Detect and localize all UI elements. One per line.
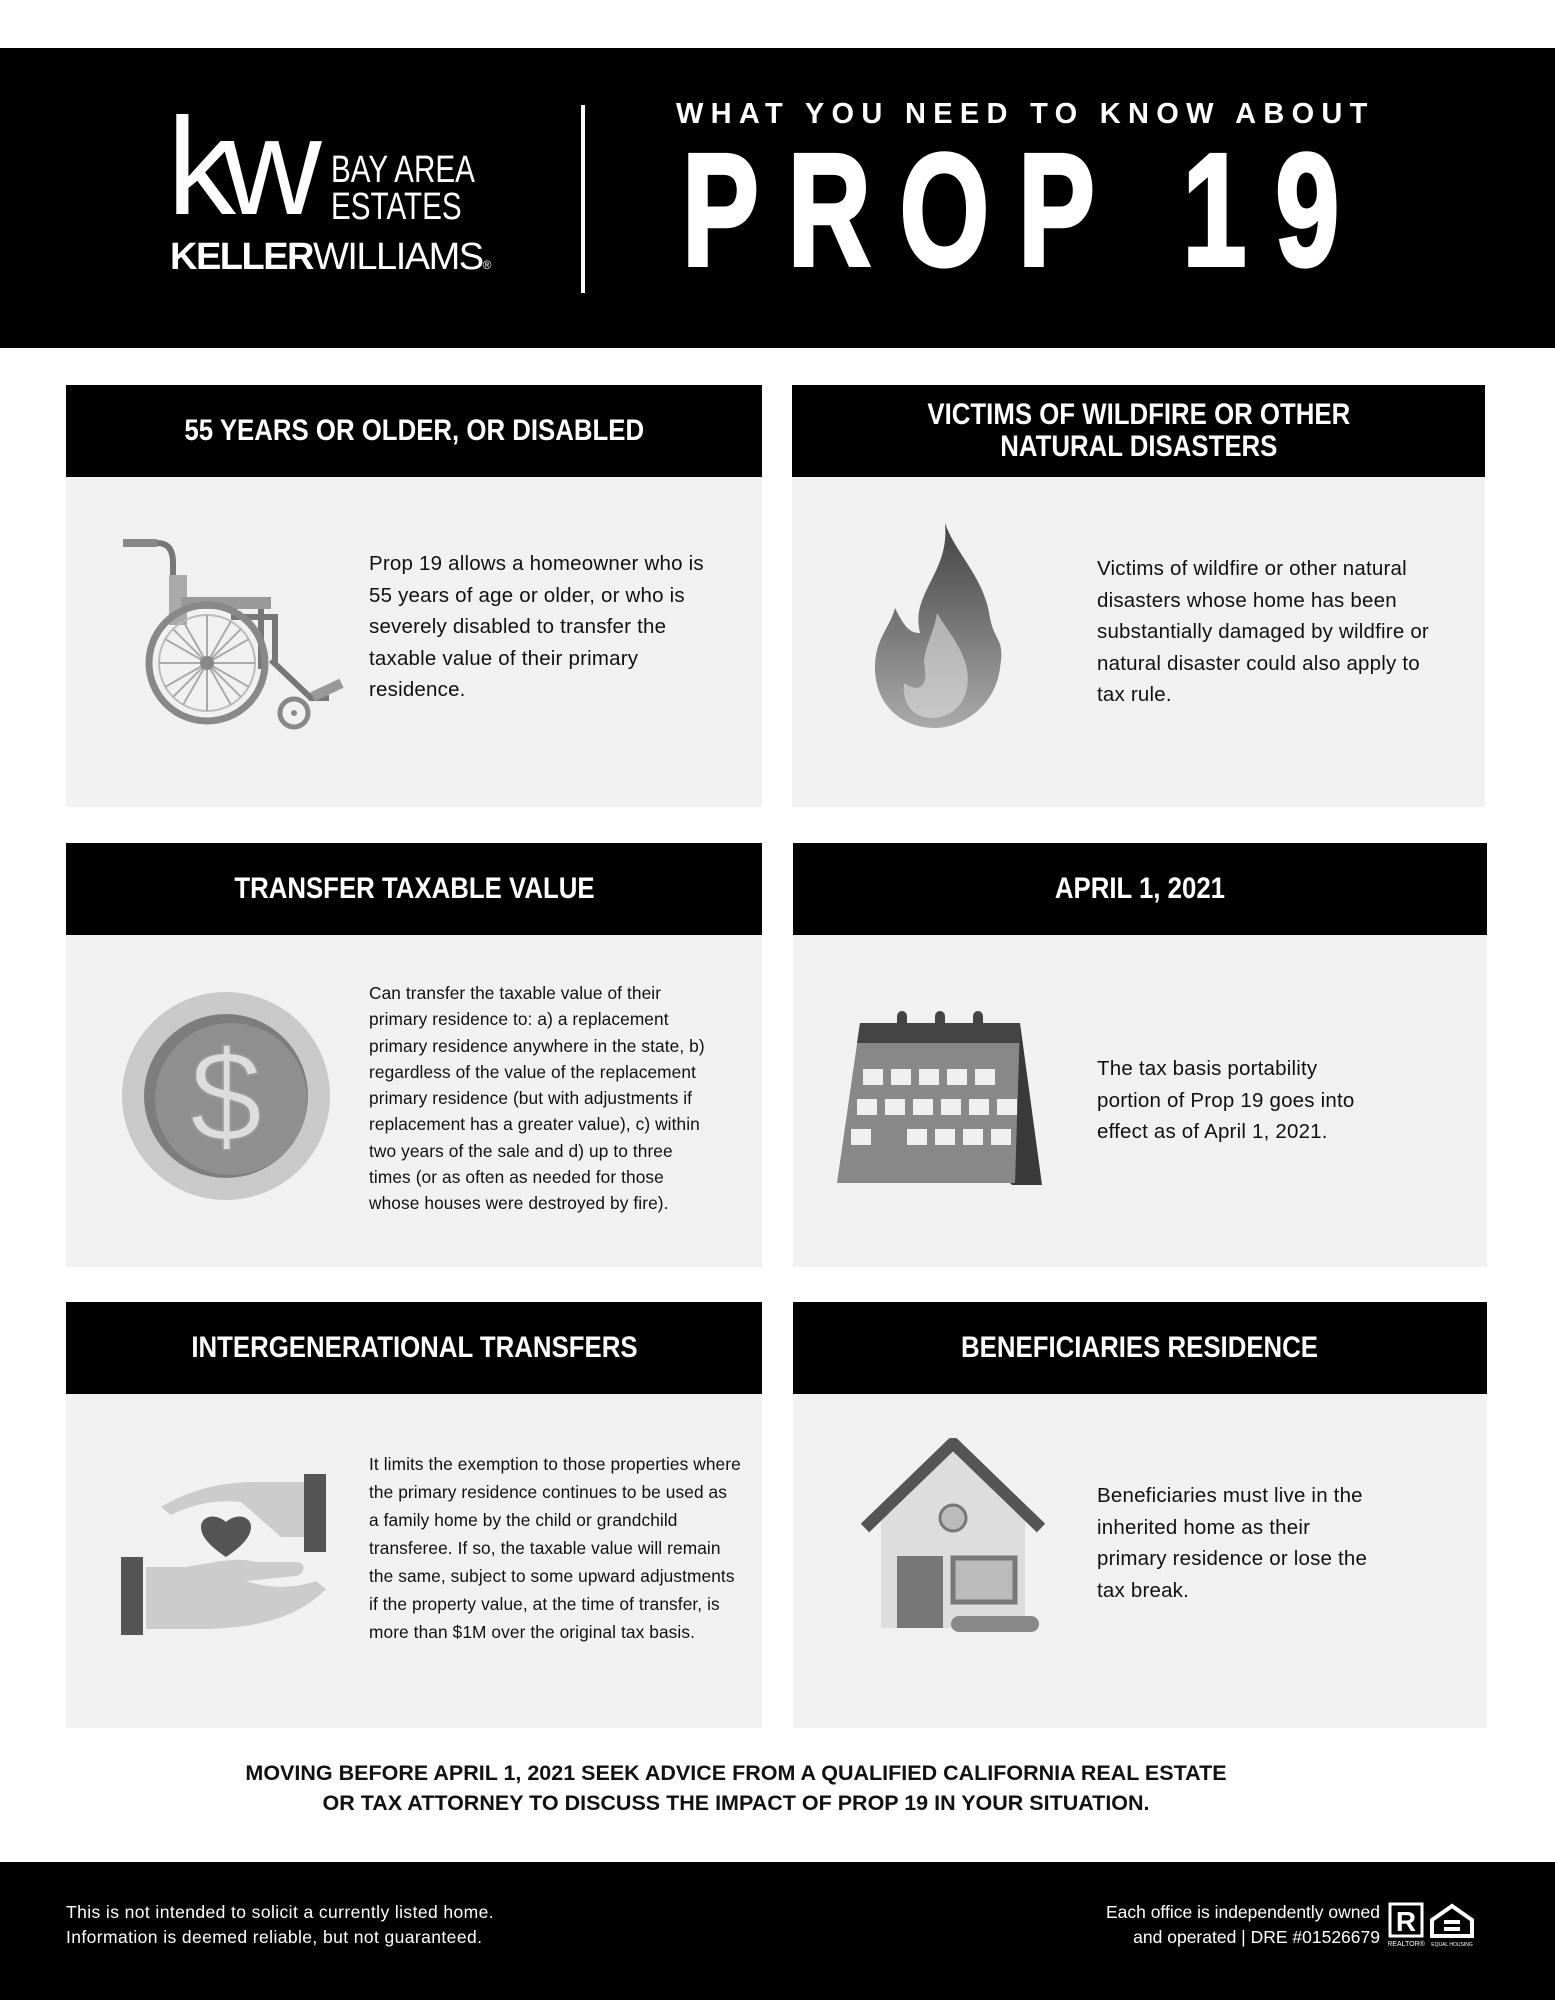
icon: coin: $ [190, 1023, 262, 1169]
icon: realtor and equal housing: REALTOR® [1388, 1940, 1426, 1948]
panel: transfer taxable value [66, 843, 762, 1267]
heading [66, 1302, 762, 1394]
logo kw mark: kw [167, 90, 308, 244]
panel: 55 years [66, 385, 762, 807]
text: The tax basis portability portion of Prop 19 goes into effect as of April 1, 2021. [1097, 1057, 1354, 1143]
icon: realtor and equal housing: EQUAL HOUSING [1431, 1942, 1473, 1948]
heading: VICTIMS OF WILDFIRE OR OTHER [927, 398, 1350, 431]
heading: INTERGENERATIONAL TRANSFERS [191, 1331, 637, 1364]
footer [0, 1862, 1555, 2000]
icon: realtor and equal housing: R [1396, 1906, 1416, 1937]
panel: april 1 2021 [793, 843, 1487, 1267]
heading: BENEFICIARIES RESIDENCE [962, 1331, 1318, 1364]
panel: wildfire [792, 385, 1485, 807]
main title PROP 19: PROP 19 [682, 120, 1368, 299]
footer disclaimer [66, 1902, 494, 1947]
text: tax break. [1097, 1578, 1189, 1602]
logo bay area estates: BAY AREA [331, 149, 475, 191]
heading [66, 385, 762, 477]
panel: beneficiaries [793, 1302, 1487, 1728]
heading: TRANSFER TAXABLE VALUE [234, 872, 594, 905]
callout: bottom advice: MOVING BEFORE APRIL 1, 2021 SEEK ADVICE FROM A QUALIFIED CALIFORNIA REAL ESTATE [245, 1761, 1227, 1785]
heading: 55 YEARS OR OLDER, OR DISABLED [184, 414, 644, 447]
icon: house [861, 1438, 1045, 1632]
text: Victims of wildfire or other natural disasters whose home has been substantially damaged by wildfire or natural disaster could also apply to tax rule. [1097, 557, 1429, 706]
text: Prop 19 allows a homeowner who is 55 years of age or older, or who is severely disabled to transfer the taxable value of their primary residence. [369, 552, 704, 701]
panel: intergenerational [66, 1302, 762, 1728]
header band [0, 48, 1555, 348]
icon: realtor and equal housing [1388, 1902, 1474, 1948]
heading [66, 843, 762, 935]
logo keller williams: KELLERWILLIAMS® [170, 236, 490, 278]
heading [792, 385, 1485, 477]
logo [167, 90, 492, 278]
footer disclaimer: Information is deemed reliable, but not guaranteed. [66, 1927, 482, 1947]
text: inherited home as their [1097, 1516, 1310, 1538]
heading: NATURAL DISASTERS [1000, 430, 1277, 463]
logo bay area estates: ESTATES [331, 186, 462, 228]
text: Can transfer the taxable value of their primary residence to: a) a replacement primary residence anywhere in the state, b) regardless of the value of the replacement primary residence (but with adjustments if replacement has a greater value), c) within two years of the sale and d) up to three times (or as often as needed for those whose houses were destroyed by fire). [369, 983, 705, 1213]
icon: hands with heart [121, 1474, 326, 1635]
footer disclaimer: This is not intended to solicit a currently listed home. [66, 1902, 494, 1922]
text [1097, 1484, 1367, 1602]
text: It limits the exemption to those properties where the primary residence continues to be used as a family home by the child or grandchild transferee. If so, the taxable value will remain the same, subject to some upward adjustments if the property value, at the time of transfer, is more than $1M over the original tax basis. [369, 1454, 741, 1642]
heading [793, 843, 1487, 935]
heading [793, 1302, 1487, 1394]
header subtitle: WHAT YOU NEED TO KNOW ABOUT [676, 98, 1375, 130]
footer office info: Each office is independently owned [1106, 1902, 1380, 1922]
icon: flame [875, 523, 1002, 728]
icon: coin [122, 992, 330, 1200]
footer office info: and operated | DRE #01526679 [1133, 1927, 1380, 1947]
callout: bottom advice [245, 1761, 1227, 1815]
callout: bottom advice: OR TAX ATTORNEY TO DISCUSS THE IMPACT OF PROP 19 IN YOUR SITUATION. [322, 1791, 1150, 1815]
text: Beneficiaries must live in the [1097, 1484, 1363, 1507]
footer office info [1106, 1902, 1380, 1947]
text: primary residence or lose the [1097, 1547, 1367, 1570]
logo bay area estates [331, 149, 475, 228]
icon: calendar [837, 1011, 1042, 1185]
icon: wheelchair [123, 539, 344, 730]
heading: APRIL 1, 2021 [1055, 872, 1225, 905]
